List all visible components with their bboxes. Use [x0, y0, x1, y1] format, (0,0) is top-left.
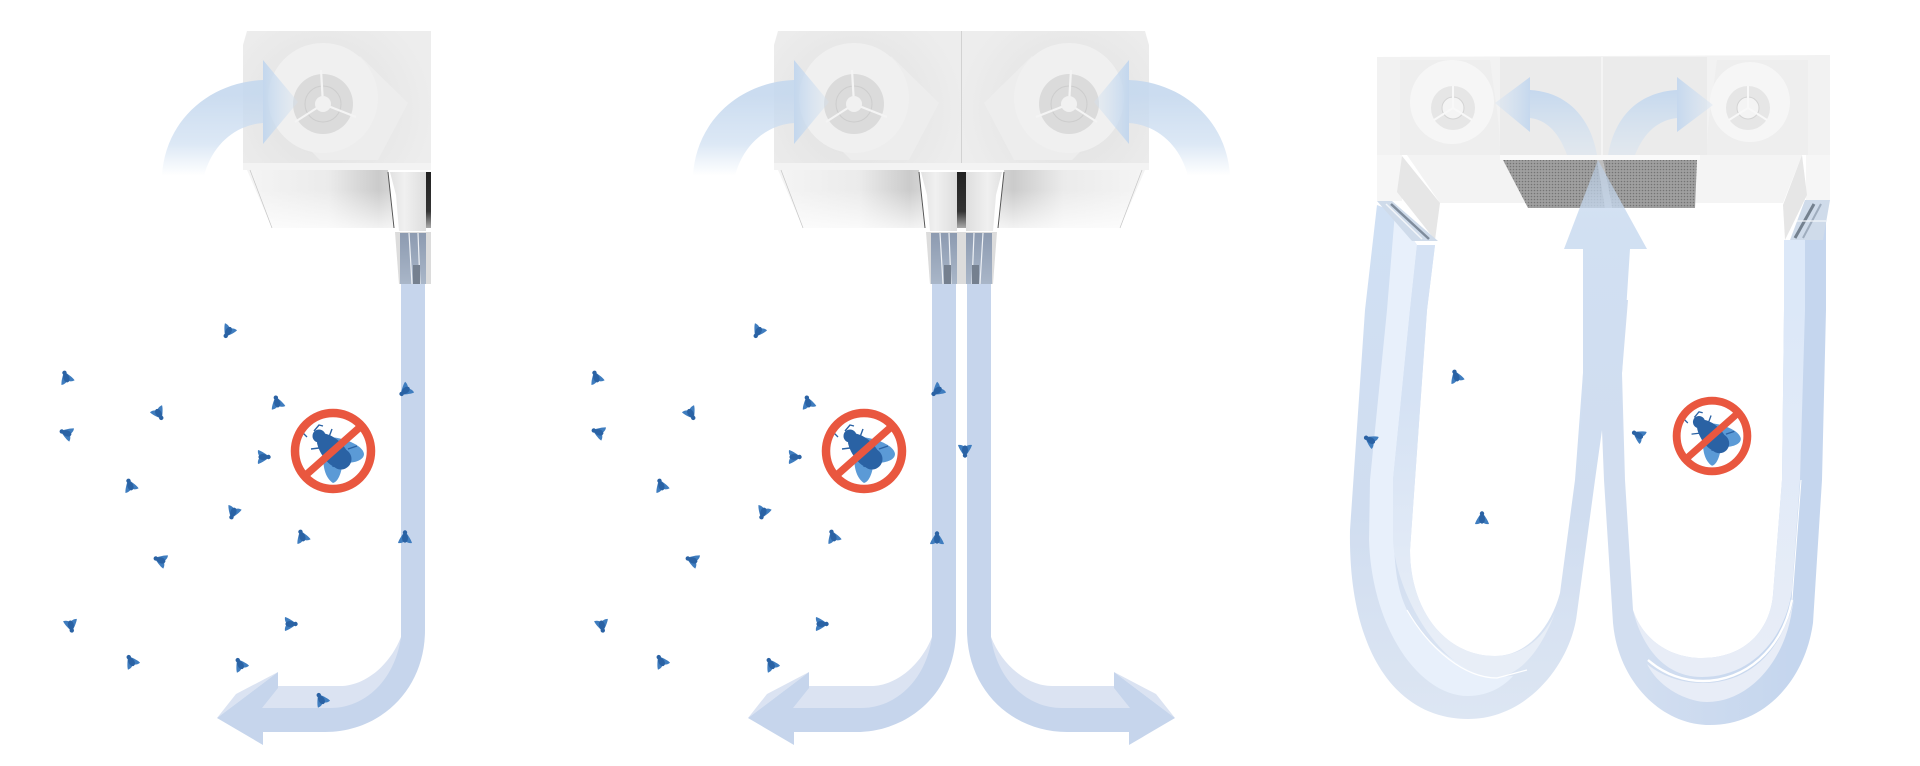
- right inner arrow to fan: [1608, 77, 1713, 155]
- panel: single unit: [57, 31, 431, 745]
- left air jet arrow: [748, 284, 956, 745]
- right air jet arrow: [967, 284, 1175, 745]
- panel: double unit: [587, 31, 1230, 745]
- right U-shaped air stream: [1602, 205, 1826, 725]
- icon: no flies sign: [826, 413, 902, 489]
- housing seam: [960, 31, 962, 163]
- icon: no flies sign: [295, 413, 371, 489]
- panel: recirculating unit: [1350, 55, 1830, 725]
- left intake arrow: [693, 60, 829, 176]
- perforated return grilles: [1503, 160, 1697, 208]
- right curtain unit: [961, 31, 1149, 284]
- air jet arrow: [217, 284, 425, 745]
- flies scattered: [57, 323, 414, 708]
- left U-shaped air stream: [1350, 205, 1602, 719]
- curtain unit with fan: [243, 31, 431, 284]
- flies scattered: [1361, 367, 1647, 524]
- left inner arrow to fan: [1495, 77, 1597, 155]
- icon: no flies sign: [1677, 401, 1747, 471]
- central return air arrow: [1564, 160, 1647, 430]
- air intake arrow: [162, 60, 298, 176]
- flies scattered: [587, 323, 972, 673]
- housing with two fans: [1377, 55, 1830, 155]
- left curtain unit: [774, 31, 962, 284]
- right intake arrow: [1094, 60, 1230, 176]
- lower body and side ducts: [1377, 155, 1830, 241]
